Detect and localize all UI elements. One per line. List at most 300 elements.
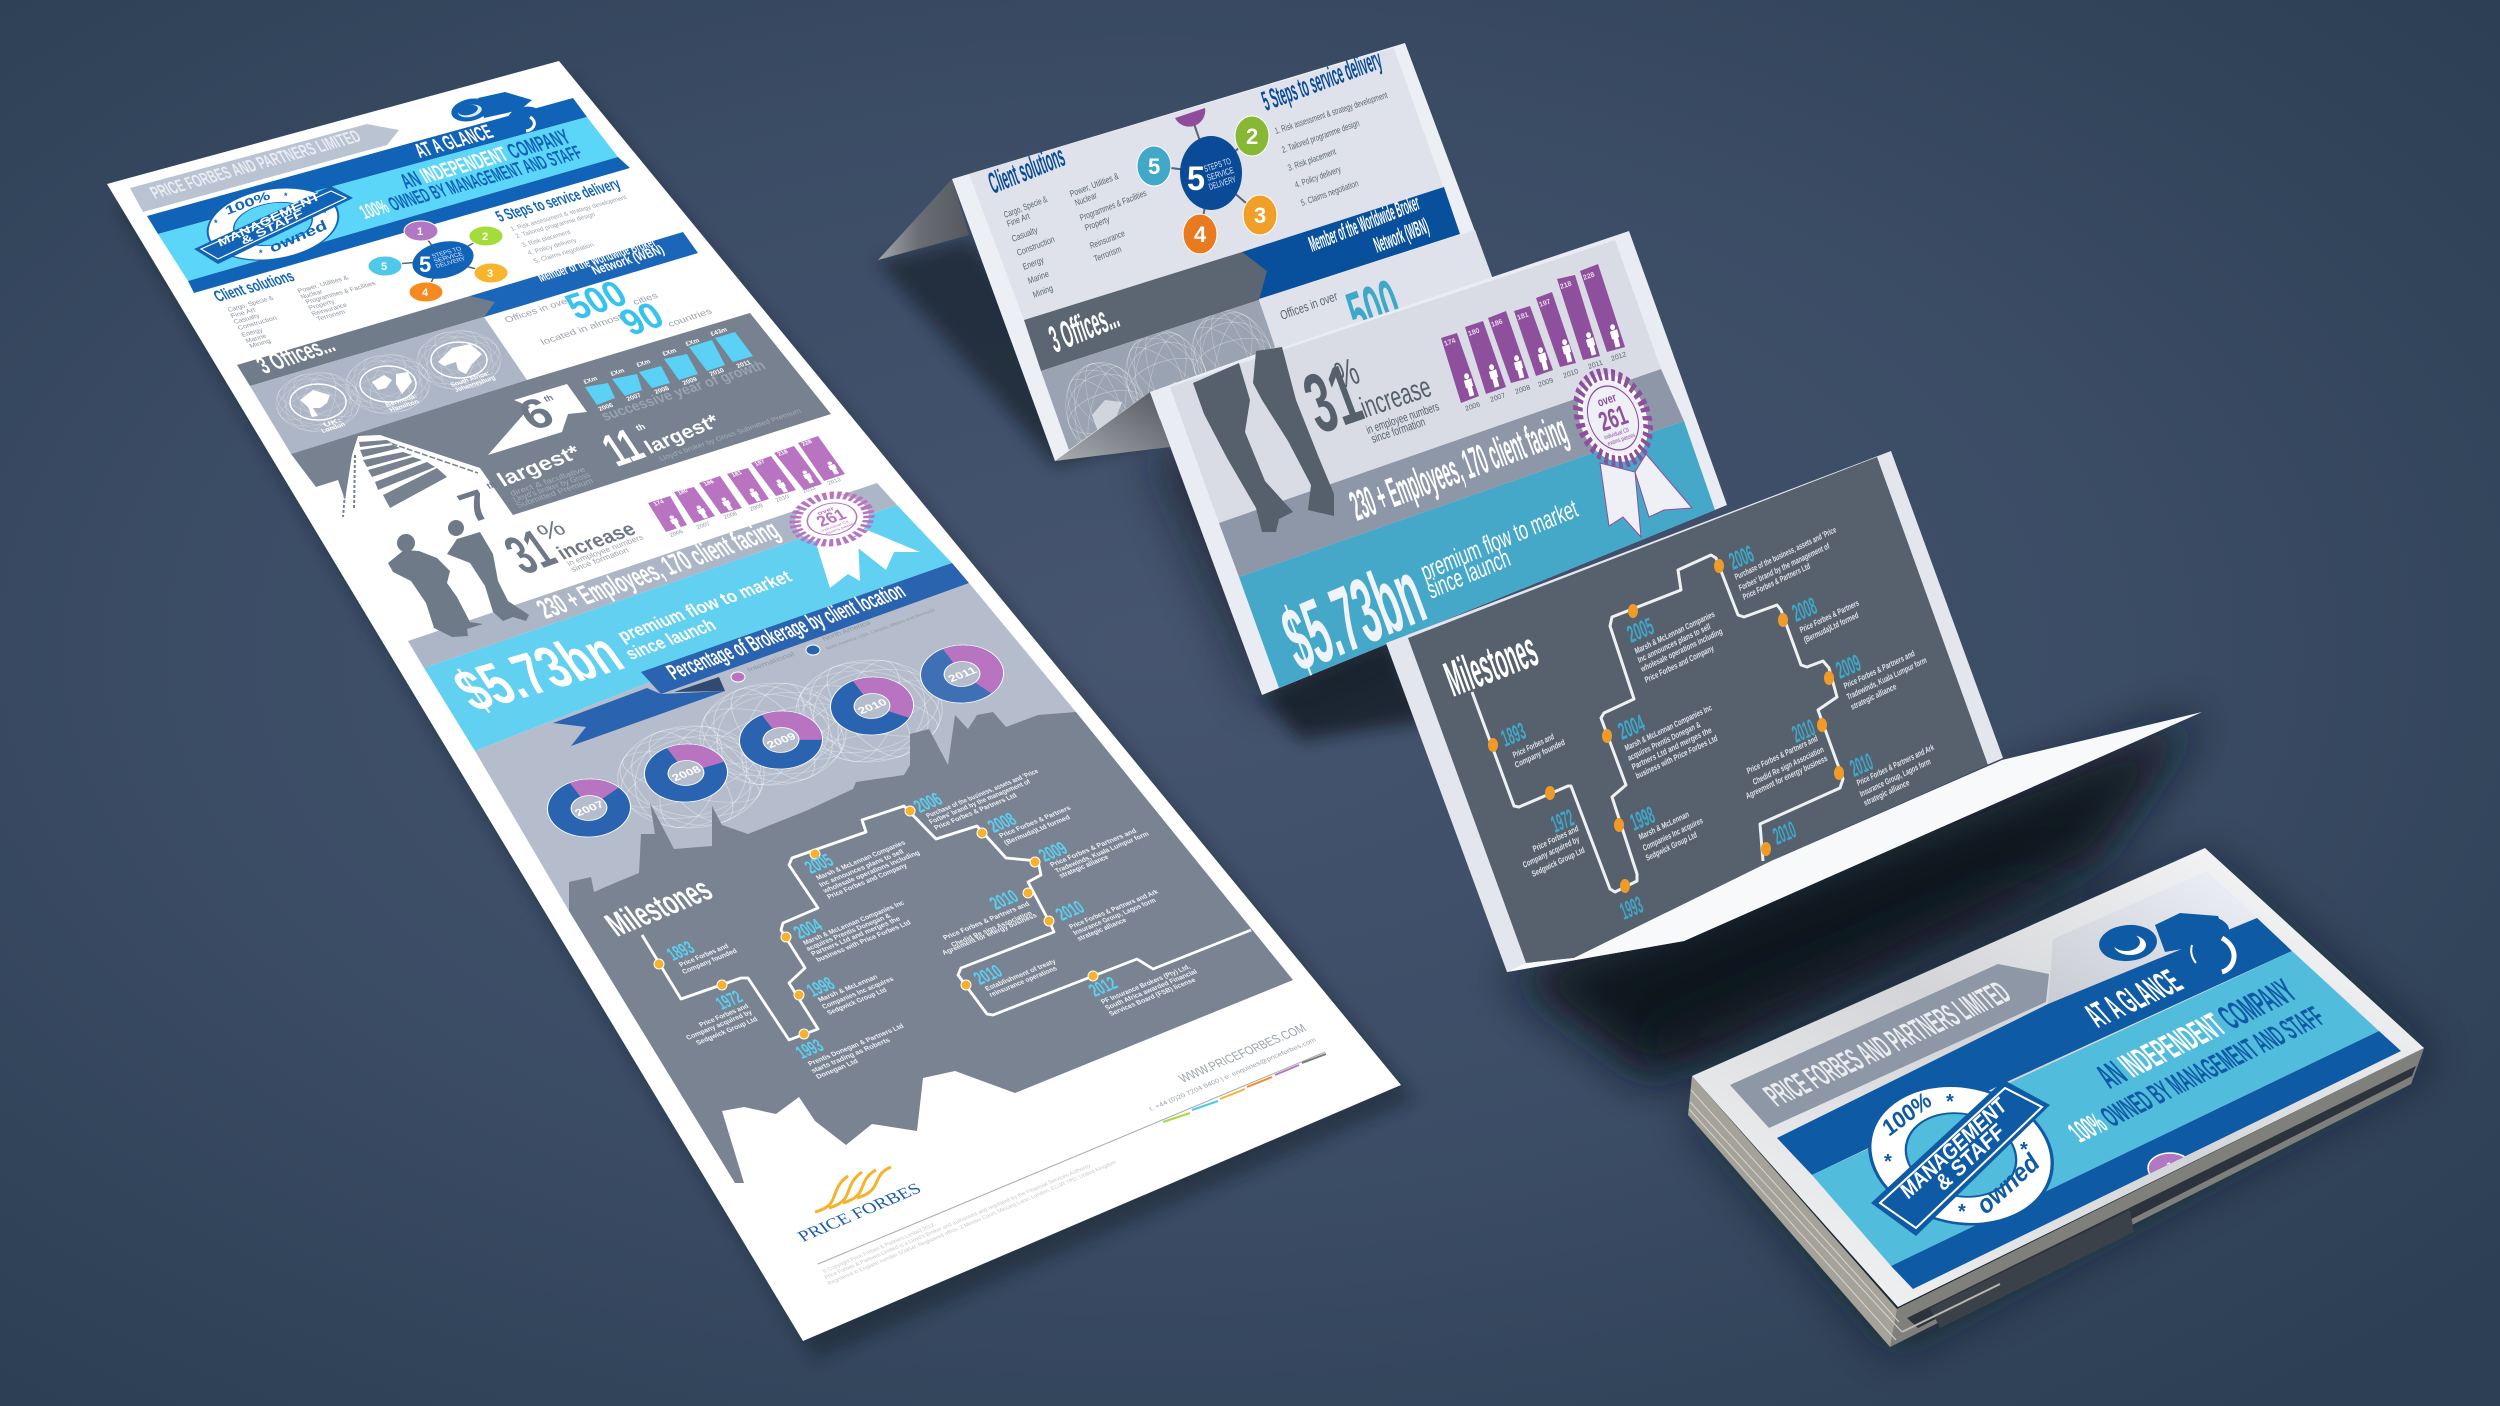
milestone descriptions: Sedgwick Group Ltd	[1644, 829, 1698, 863]
grey offices panel	[1041, 300, 1276, 450]
donut 2007: 2007	[573, 799, 607, 819]
milestone descriptions: Inc announces plans to sell	[818, 849, 905, 889]
milestone years: 2009	[1833, 650, 1864, 685]
employee bars: 174	[1443, 338, 1457, 348]
donut 2009	[724, 700, 838, 780]
donut legend: North America	[821, 620, 872, 643]
panel paper	[1150, 231, 1727, 695]
rosette	[1566, 365, 1692, 537]
milestone years: 2010	[970, 962, 1007, 989]
employee bar chart: 228	[801, 439, 814, 448]
rosette: individual CII	[1603, 427, 1630, 442]
employee bars: 2012	[1610, 351, 1628, 363]
milestone descriptions: strategic alliance	[1862, 777, 1911, 808]
employee bars: 186	[1490, 319, 1504, 329]
donut 2009: 2009	[765, 731, 799, 751]
text: 31% increase: in employee numbers	[565, 533, 645, 568]
5 steps list: 3. Risk placement	[520, 229, 572, 249]
copyright text: © Copyright Price Forbes & Partners Limited 2012.	[821, 1221, 938, 1275]
milestone years: 2012	[1085, 974, 1122, 1001]
client solutions block: Cargo, Specie &	[226, 295, 276, 314]
milestone years: 1972	[712, 987, 747, 1014]
milestone descriptions: Marsh & McLennan	[1637, 809, 1690, 842]
steps list	[1273, 90, 1389, 208]
footer website and contact: WWW.PRICEFORBES.COM	[1176, 1021, 1309, 1085]
milestone descriptions: Purchase of the business, assets and 'Price	[1733, 524, 1838, 582]
client solutions block: Fine Art	[229, 307, 257, 320]
stamp: & STAFF	[1931, 1118, 2009, 1196]
logo: Price Forbes	[794, 1167, 925, 1245]
milestone route line	[1472, 555, 1843, 892]
text: 31% increase: in employee numbers	[1364, 399, 1441, 437]
flap front	[1507, 712, 2202, 972]
milestone descriptions: Donegan Ltd	[815, 1058, 860, 1081]
globes	[1066, 310, 1272, 443]
milestone descriptions: Price Forbes & Partners and	[1745, 733, 1819, 776]
milestone years: 2010	[1052, 898, 1089, 925]
stamp: *	[1958, 1201, 1966, 1223]
stamp: 100% management and staff owned: MANAGEMENT	[216, 191, 322, 250]
rosette: 261 exams: 261	[813, 506, 850, 530]
stamp: 100% management and staff owned: *	[259, 248, 263, 258]
milestone descriptions: (Bermuda)Ltd formed	[1802, 610, 1860, 645]
5 steps wheel: 4	[1194, 222, 1207, 247]
3 offices band	[237, 296, 495, 386]
logo: Price Forbes: PRICE FORBES	[794, 1180, 925, 1245]
milestone descriptions	[678, 768, 1199, 1081]
office labels: South Africa:	[449, 370, 491, 389]
milestone descriptions: strategic alliance	[1849, 681, 1898, 712]
stamp: *	[1884, 1151, 1892, 1173]
footer website and contact: t. +44 (0)20 7204 8400 | e. enquiries@priceforbes.com	[1148, 1037, 1318, 1113]
milestone years: 2005	[801, 851, 838, 878]
employee bars: 2008	[1514, 384, 1532, 396]
client solutions block: Marine	[244, 333, 269, 345]
milestone descriptions: Sedgwick Group Ltd	[695, 1016, 759, 1047]
donut 2008: 2008	[670, 764, 704, 784]
milestone years: 2010	[1770, 817, 1800, 851]
milestone descriptions: Price Forbes & Partners	[1798, 597, 1860, 635]
milestone descriptions: Partners Ltd and merges the	[1630, 725, 1713, 772]
milestone years: 2010	[1847, 749, 1877, 783]
milestone descriptions: Company founded	[1513, 737, 1566, 770]
blue ribbon tail	[553, 688, 725, 746]
text: premium flow: premium flow to market	[1417, 493, 1582, 587]
offices figures: 90	[612, 295, 672, 343]
client solutions block: Casualty	[232, 313, 262, 326]
milestone descriptions: Partners Ltd and merges the	[810, 916, 902, 958]
donut legend: International	[746, 651, 797, 674]
booklet stack: AT A GLANCE	[2076, 963, 2191, 1035]
copyright text: Price Forbes & Partners Limited is a Lloyd's Broker and authorised and regulated by the Financial Services Authority	[824, 1163, 1092, 1281]
wire globes behind donuts	[617, 660, 943, 828]
booklet stack	[1688, 848, 2424, 1347]
panel body	[1170, 240, 1661, 523]
milestone descriptions: Price Forbes and	[678, 943, 730, 969]
offices text	[1278, 265, 1410, 354]
WBN band	[470, 232, 698, 317]
milestone descriptions: Marsh & McLennan Companies	[1633, 609, 1716, 656]
heading: company name: PRICE FORBES AND PARTNERS LIMITED	[147, 127, 365, 203]
text: 11th largest: largest*	[641, 411, 724, 458]
text: $5.73bn: $5.73bn	[440, 619, 636, 723]
brochure panel 2: employees	[1150, 231, 1727, 695]
employee bar chart: 186	[703, 479, 716, 488]
client solutions block: Mining	[248, 338, 273, 350]
lower blue band	[188, 157, 630, 293]
rosette: 261	[1595, 400, 1632, 438]
employee bars: 2009	[1537, 377, 1555, 389]
client solutions block: Reinsurance	[310, 302, 349, 318]
employee bars: 2007	[1489, 392, 1507, 404]
milestone descriptions: Chedid Re sign Association	[950, 910, 1034, 949]
icon: binoculars	[2098, 913, 2236, 974]
milestone descriptions: acquires Prentis Donegan &	[805, 913, 892, 953]
milestone descriptions: acquires Prentis Donegan &	[1626, 719, 1702, 763]
client list: Marine	[1026, 268, 1050, 286]
5 steps wheel: 5	[419, 252, 431, 277]
milestone descriptions: reinsurance operations	[988, 966, 1059, 999]
blue ribbon	[641, 563, 969, 694]
milestone descriptions: Forbes' brand by the management of	[1737, 540, 1831, 593]
5 steps wheel: 5	[381, 261, 387, 273]
stamp	[1834, 1061, 2088, 1249]
text: premium flow: since launch	[622, 616, 720, 664]
tagline 1: AN INDEPENDENT COMPANY	[395, 124, 575, 193]
client list: Fine Art	[1005, 211, 1031, 229]
milestone descriptions: Price Forbes & Partners	[998, 805, 1073, 840]
5 steps wheel: SERVICE	[1205, 165, 1235, 183]
milestone descriptions: Price Forbes & Partners and Ark	[1855, 742, 1935, 788]
silhouettes: business people	[388, 520, 529, 637]
arrow: 6th	[488, 384, 587, 455]
WBN text	[534, 234, 667, 285]
milestone dots	[1488, 559, 1844, 893]
text: 31% increase	[493, 515, 645, 586]
copyright text: Registered in England number 5/3454/. Registered office: 2 Minster Court, Mincing Lane, London, EC3R 7PD, United Kingdom	[827, 1160, 1119, 1287]
milestone route line	[642, 806, 1251, 1040]
milestone years: 1893	[1498, 718, 1529, 753]
milestone years: 2009	[1035, 839, 1072, 866]
text: 230 employees: 230 + Employees, 170 client facing	[531, 515, 786, 625]
globes	[248, 311, 529, 451]
blue band	[1777, 918, 2292, 1175]
milestone descriptions: Price Forbes and	[1531, 823, 1580, 854]
5 steps wheel: 4	[422, 287, 429, 299]
client solutions block: Terrorism	[315, 309, 347, 323]
milestone descriptions: Prentis Donegan & Partners Ltd	[807, 1023, 906, 1068]
bottom fold flap	[1507, 712, 2202, 972]
text: premium flow: since launch	[1423, 542, 1514, 605]
dark panel	[1408, 457, 1988, 963]
milestone descriptions	[1511, 524, 1935, 879]
stamp: owned	[1972, 1146, 2044, 1221]
employee bars: 197	[1538, 299, 1552, 309]
panel paper strips	[1386, 451, 2003, 972]
company name tag	[1730, 964, 2049, 1128]
text: 7th largest: th	[485, 480, 498, 491]
blue WBN band	[1242, 187, 1460, 299]
client solutions block: Programmes & Facilities	[304, 280, 378, 306]
top sheet	[1692, 848, 2424, 1307]
client solutions block	[210, 267, 378, 350]
footer website and contact	[1148, 1021, 1318, 1113]
5 steps wheel: 5	[1187, 160, 1205, 198]
employee bar chart: 197	[754, 459, 767, 468]
employee bars: 180	[1467, 328, 1481, 338]
5 steps list	[492, 175, 628, 265]
growth bar labels: 2011	[735, 359, 753, 370]
milestone descriptions: Sedgwick Group Ltd	[1530, 845, 1586, 879]
milestone descriptions: Purchase of the business, assets and 'Price	[925, 768, 1040, 820]
employee bars: 228	[1582, 272, 1596, 282]
silhouettes	[1193, 347, 1334, 532]
WBN text: Network (WBN)	[588, 242, 667, 278]
heading: at a glance: AT A GLANCE	[410, 120, 497, 162]
milestone descriptions: Price Forbes & Partners Ltd	[933, 793, 1019, 832]
milestone descriptions: Marsh & McLennan Companies	[815, 840, 907, 882]
milestone years: 1893	[663, 938, 699, 965]
milestone descriptions: PF Insurance Brokers (Pty) Ltd,	[1100, 964, 1192, 1006]
milestone descriptions: Price Forbes and Company	[1643, 643, 1715, 685]
milestone years: 2008	[1789, 593, 1820, 628]
step 1 circle: 1	[2166, 1161, 2172, 1173]
top blue band	[147, 98, 587, 234]
growth bar labels: 2010	[708, 367, 726, 378]
milestone descriptions: Company acquired by	[1521, 834, 1581, 870]
text: 11th largest: th	[634, 422, 647, 433]
milestone years: 2010	[986, 887, 1023, 914]
employee bars: 181	[1516, 312, 1530, 322]
5 steps list: 5 Steps to service delivery	[492, 175, 624, 225]
donut 2011: 2011	[946, 665, 980, 684]
brochure panel 2: employees: 230 + Employees, 170 client facing	[1344, 406, 1573, 529]
growth bar labels: £Xm	[609, 368, 626, 378]
lower blue band	[1891, 1031, 2401, 1289]
text: 7th largest: 7	[449, 480, 502, 531]
growth bar labels: £Xm	[635, 359, 652, 369]
offices figures: cities	[631, 290, 660, 307]
milestone descriptions: Marsh & McLennan Companies Inc	[1623, 702, 1713, 753]
brochure panel 3: milestones: Milestones	[1438, 621, 1544, 707]
client list	[1002, 171, 1148, 300]
text: 31% increase: %	[532, 515, 571, 546]
brochure panel 2: employees: $5.73bn	[1270, 541, 1437, 692]
text: 31% increase: 31	[493, 518, 567, 586]
5 steps wheel: SERVICE	[433, 251, 465, 265]
WBN text	[1306, 190, 1432, 258]
client list: Mining	[1031, 283, 1054, 300]
growth bar labels: £43m	[709, 327, 729, 338]
dark skyline panel	[569, 712, 1293, 1183]
long infographic sheet	[107, 61, 1401, 1341]
sheet paper	[107, 61, 1401, 1341]
milestone descriptions: Price Forbes & Partners Ltd	[1741, 561, 1811, 602]
footer colour dashes	[818, 1052, 1326, 1264]
growth bar labels: 2009	[681, 376, 699, 387]
growth bar labels	[582, 327, 753, 413]
milestone descriptions: wholesale operations including	[821, 850, 921, 895]
text: successive year of growth: successive year of growth	[598, 357, 769, 424]
milestone descriptions: Establishment of treaty	[984, 958, 1058, 993]
stamp: 100% management and staff owned: *	[284, 191, 288, 201]
office labels: UK:	[322, 417, 343, 429]
cyan premium band	[424, 505, 952, 751]
5 steps wheel: 2	[1246, 124, 1258, 149]
employee bar chart: 2010	[775, 494, 791, 504]
steps list: 1. Risk assessment & strategy development	[1273, 90, 1389, 136]
rosette: 261 exams: individual CII	[820, 520, 850, 533]
milestone descriptions: Price Forbes & Partners and	[942, 901, 1031, 942]
client solutions block: Power, Utilities &	[296, 275, 351, 295]
employee bars	[1441, 264, 1628, 413]
stamp: *	[1946, 1091, 1954, 1113]
office labels	[320, 370, 497, 435]
milestone descriptions: Marsh & McLennan	[817, 974, 879, 1004]
grey employees band	[408, 483, 897, 668]
stamp: 100% management and staff owned: *	[214, 218, 218, 228]
donut 2010: 2010	[856, 697, 890, 717]
5 steps list: 2. Tailored programme design	[514, 211, 597, 240]
employee bar chart: 2009	[749, 503, 765, 513]
employee bar chart: 181	[731, 470, 744, 479]
milestone descriptions: Forbes' brand by the management of	[928, 779, 1033, 826]
text: premium flow	[614, 567, 797, 664]
growth bar labels: 2008	[653, 385, 671, 396]
milestone descriptions: Insurance Group, Lagos form	[1858, 756, 1932, 799]
5 steps wheel: STEPS TO	[1202, 156, 1232, 174]
5 steps wheel: STEPS TO	[431, 246, 463, 260]
fold flap left of brochure panel 1	[878, 179, 969, 260]
employee bars: 2010	[1562, 368, 1580, 380]
5 steps wheel	[368, 221, 508, 302]
ribbon fold	[674, 677, 725, 692]
milestone descriptions: Price Forbes and	[698, 1003, 750, 1029]
dark growth panel	[291, 313, 831, 515]
text: 11th largest: 11	[592, 419, 653, 476]
brochure panel 1: client solutions	[952, 43, 1495, 487]
employee bars: 2006	[1464, 401, 1482, 413]
fold flap between panels 1 and 2	[1055, 392, 1170, 461]
milestone descriptions: strategic alliance	[1076, 917, 1128, 943]
milestone years: 1998	[1627, 802, 1658, 837]
milestone descriptions: (Bermuda)Ltd formed	[1003, 814, 1072, 847]
heading: milestones: Milestones	[597, 870, 720, 943]
milestone descriptions: South Africa awarded Financial	[1104, 969, 1199, 1012]
offices figures: countries	[666, 306, 714, 329]
booklet stack: PRICE FORBES AND PARTNERS LIMITED	[1756, 975, 2019, 1113]
growth bar labels: £Xm	[661, 348, 678, 358]
steps list: 2. Tailored programme design	[1280, 118, 1361, 155]
milestone years: 1972	[1548, 805, 1578, 839]
milestone years: 2004	[1615, 710, 1649, 746]
milestone descriptions: Insurance Group, Lagos form	[1072, 898, 1158, 937]
text: premium flow: premium flow to market	[614, 567, 797, 646]
text: 31% increase: since formation	[569, 546, 631, 574]
text: 6th: th	[542, 393, 555, 404]
5 steps wheel: 5	[1148, 154, 1160, 179]
milestone descriptions: Company founded	[681, 948, 739, 976]
text: 31% increase: increase	[553, 519, 640, 564]
client solutions block: Client solutions	[210, 267, 298, 305]
milestone years: 2006	[910, 790, 947, 817]
5 steps wheel: 2	[482, 231, 488, 243]
tagline 2: 100% OWNED BY MANAGEMENT AND STAFF	[356, 142, 587, 223]
heading: 3 offices: 3 Offices...	[252, 332, 340, 379]
milestone years: 1993	[1617, 892, 1647, 926]
text: 31% increase: %	[1330, 351, 1365, 397]
5 steps list: 4. Policy delivery	[526, 237, 579, 257]
office labels: Bermuda:	[384, 393, 419, 409]
client list: Programmes & Facilities	[1078, 188, 1148, 223]
offices figures	[503, 274, 714, 347]
step 1 circle	[2147, 1152, 2186, 1174]
client list: Construction	[1015, 234, 1056, 258]
5 steps wheel: DELIVERY	[435, 256, 467, 270]
milestone descriptions: Agreement for energy business	[1744, 753, 1829, 801]
donut 2010	[815, 666, 929, 746]
milestone years	[663, 790, 1122, 1063]
text: premium flow	[1417, 493, 1582, 605]
office labels: Hamilton	[388, 399, 421, 414]
milestone dots	[654, 806, 1098, 1039]
milestone descriptions: Inc announces plans to sell	[1636, 621, 1712, 665]
brochure panel 3: milestones	[1386, 451, 2202, 972]
donut 2011	[905, 634, 1019, 714]
rosette: 261 exams: over	[816, 506, 836, 517]
stamp: 100% management and staff owned	[191, 175, 355, 273]
milestone descriptions: starts trading as Roberts	[810, 1037, 892, 1075]
milestone descriptions: Tradewinds, Kuala Lumpur form	[1845, 655, 1928, 702]
offices text: 500	[1338, 265, 1410, 354]
5 steps list: 5. Claims negotiation	[532, 242, 596, 265]
client solutions block: Property	[307, 299, 337, 312]
milestone descriptions: wholesale operations including	[1639, 626, 1724, 674]
offices figures: 500	[558, 274, 635, 327]
brochure panel 1: client solutions: Network (WBN)	[1371, 213, 1432, 258]
5 steps wheel: DELIVERY	[1207, 174, 1237, 192]
client list: Casualty	[1010, 225, 1039, 244]
client list: Energy	[1021, 254, 1045, 272]
milestone descriptions: Company acquired by	[685, 1009, 754, 1042]
5 steps wheel: 3	[1254, 203, 1266, 228]
text: 31% increase: increase	[1356, 371, 1436, 425]
employee bar chart: 2007	[696, 521, 712, 531]
offices light panel	[250, 317, 527, 454]
rosette: 261 exams: exams passes	[825, 521, 857, 535]
milestone descriptions: Price Forbes & Partners and	[1049, 828, 1138, 869]
milestone descriptions: Sedgwick Group Ltd	[826, 987, 888, 1017]
milestone years: 2010	[1789, 715, 1819, 749]
5 steps wheel: 1	[417, 226, 423, 238]
brochure panel 1: client solutions: Client solutions	[985, 140, 1069, 201]
client solutions block: Energy	[240, 327, 265, 339]
milestone years: 2005	[1624, 613, 1657, 649]
milestone descriptions: Services Board (FSB) license	[1108, 977, 1197, 1018]
under pages	[1688, 1048, 2424, 1347]
milestone years	[1498, 541, 1877, 926]
text: 7th largest: direct & facultative	[508, 465, 588, 498]
milestone descriptions: Price Forbes & Partners and Ark	[1068, 889, 1160, 931]
milestone descriptions: Tradewinds, Kuala Lumpur form	[1054, 831, 1151, 875]
stamp: 100% management and staff owned: owned	[267, 217, 329, 256]
milestone descriptions: Companies Inc acquires	[821, 976, 896, 1011]
employee bar chart: 218	[777, 449, 790, 458]
milestone years: 2004	[790, 915, 828, 943]
5 steps wheel: 3	[487, 268, 493, 280]
milestone years: 2006	[1726, 541, 1757, 576]
client list: Property	[1083, 214, 1111, 233]
